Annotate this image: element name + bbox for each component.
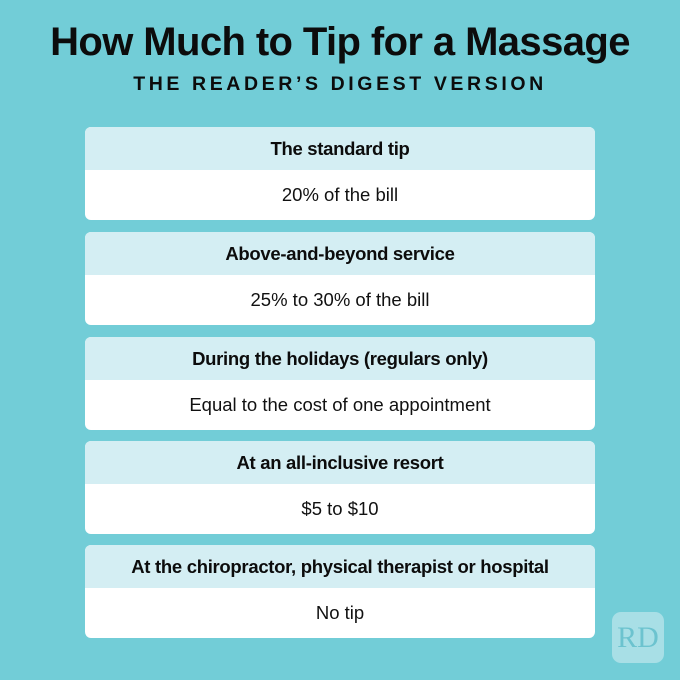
card: chiropractor — [85, 545, 595, 638]
card: chiropractor: No tip — [316, 602, 364, 623]
card: above and beyond: Above-and-beyond service — [225, 243, 455, 264]
card: holidays: During the holidays (regulars only) — [192, 348, 488, 369]
card: holidays — [85, 337, 595, 430]
logo: RD — [612, 612, 664, 663]
card: chiropractor: At the chiropractor, physical therapist or hospital — [131, 556, 549, 577]
card: resort — [85, 441, 595, 534]
card: standard tip — [85, 127, 595, 220]
card: resort: $5 to $10 — [301, 498, 379, 519]
title: How Much to Tip for a Massage — [50, 20, 630, 64]
card: above and beyond — [85, 232, 595, 325]
card: resort: At an all-inclusive resort — [236, 452, 444, 473]
card: standard tip: The standard tip — [270, 138, 410, 159]
card: standard tip: 20% of the bill — [282, 184, 398, 205]
card: holidays: Equal to the cost of one appointment — [189, 394, 491, 415]
logo: RD: RD — [617, 621, 659, 654]
subtitle: THE READER’S DIGEST VERSION — [133, 73, 547, 95]
card: above and beyond: 25% to 30% of the bill — [251, 289, 429, 310]
